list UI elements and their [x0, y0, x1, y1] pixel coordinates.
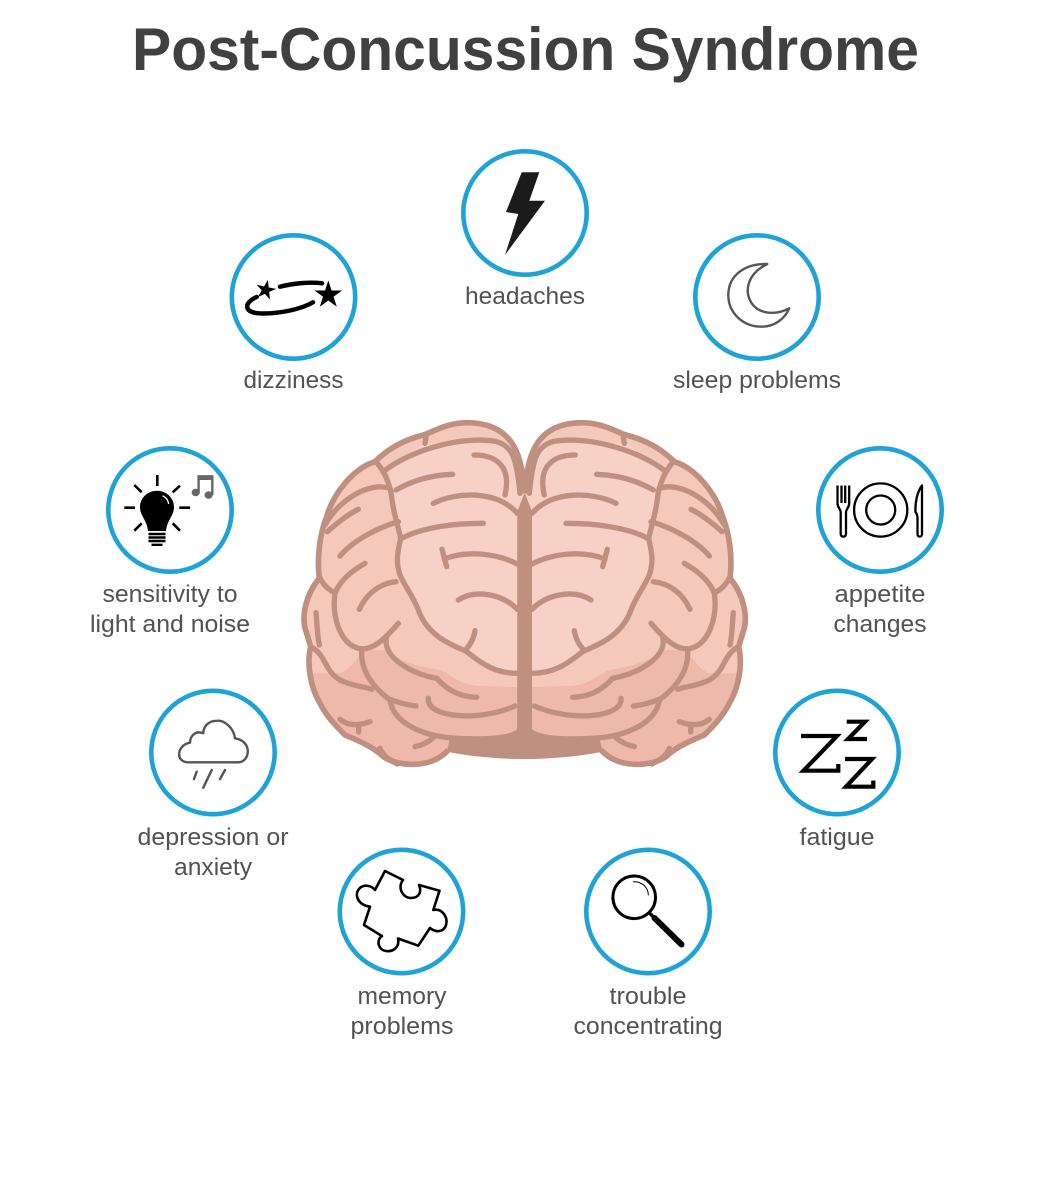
title: Post-Concussion Syndrome — [132, 15, 919, 83]
symptom: memory problems: problems — [350, 1013, 454, 1040]
dizziness circle — [232, 235, 355, 359]
sensitivity label: sensitivity to — [102, 581, 238, 608]
appetite label: appetite — [834, 581, 926, 608]
left hemisphere — [297, 423, 525, 764]
headaches circle — [463, 151, 587, 275]
symptom: depression or anxiety — [138, 691, 289, 881]
right hemisphere — [524, 423, 753, 764]
trouble circle — [586, 850, 710, 973]
icon: lightning bolt — [505, 172, 545, 255]
appetite circle — [818, 448, 942, 572]
icon: music note — [192, 475, 213, 499]
sensitivity circle — [108, 448, 232, 572]
symptom: dizziness — [232, 235, 355, 394]
symptom: appetite changes: changes — [834, 611, 926, 638]
depression label: depression or — [138, 824, 289, 851]
icon: sleeping Zs — [801, 722, 873, 787]
symptom: headaches — [463, 151, 587, 310]
symptom: depression or anxiety: anxiety — [174, 854, 252, 881]
memory label: memory — [358, 983, 446, 1010]
symptom: trouble concentrating — [574, 850, 722, 1040]
brain illustration — [297, 423, 753, 764]
symptom: sleep problems — [673, 235, 841, 394]
central fissure — [517, 493, 532, 759]
symptom: fatigue — [775, 691, 899, 851]
dizziness label: dizziness — [244, 367, 344, 394]
symptom: appetite changes — [818, 448, 942, 638]
icon: orbiting stars — [247, 278, 342, 314]
icon: puzzle piece — [357, 871, 446, 951]
depression circle — [151, 691, 275, 814]
sleep label: sleep problems — [673, 367, 841, 394]
trouble label: trouble — [610, 983, 686, 1010]
symptom: sensitivity to light and noise — [90, 448, 250, 638]
headaches label: headaches — [465, 283, 585, 310]
icon: light bulb — [124, 475, 190, 545]
icon: rain cloud — [179, 721, 248, 788]
fatigue label: fatigue — [800, 824, 874, 851]
symptom: memory problems — [340, 850, 463, 1040]
symptom: sensitivity to light and noise: light and noise — [90, 611, 250, 638]
memory circle — [340, 850, 463, 973]
icon: crescent moon — [728, 264, 789, 327]
sleep circle — [695, 235, 819, 359]
icon: plate and cutlery — [838, 483, 922, 537]
symptom: trouble concentrating: concentrating — [574, 1013, 722, 1040]
icon: magnifying glass — [613, 876, 682, 944]
fatigue circle — [775, 691, 899, 814]
